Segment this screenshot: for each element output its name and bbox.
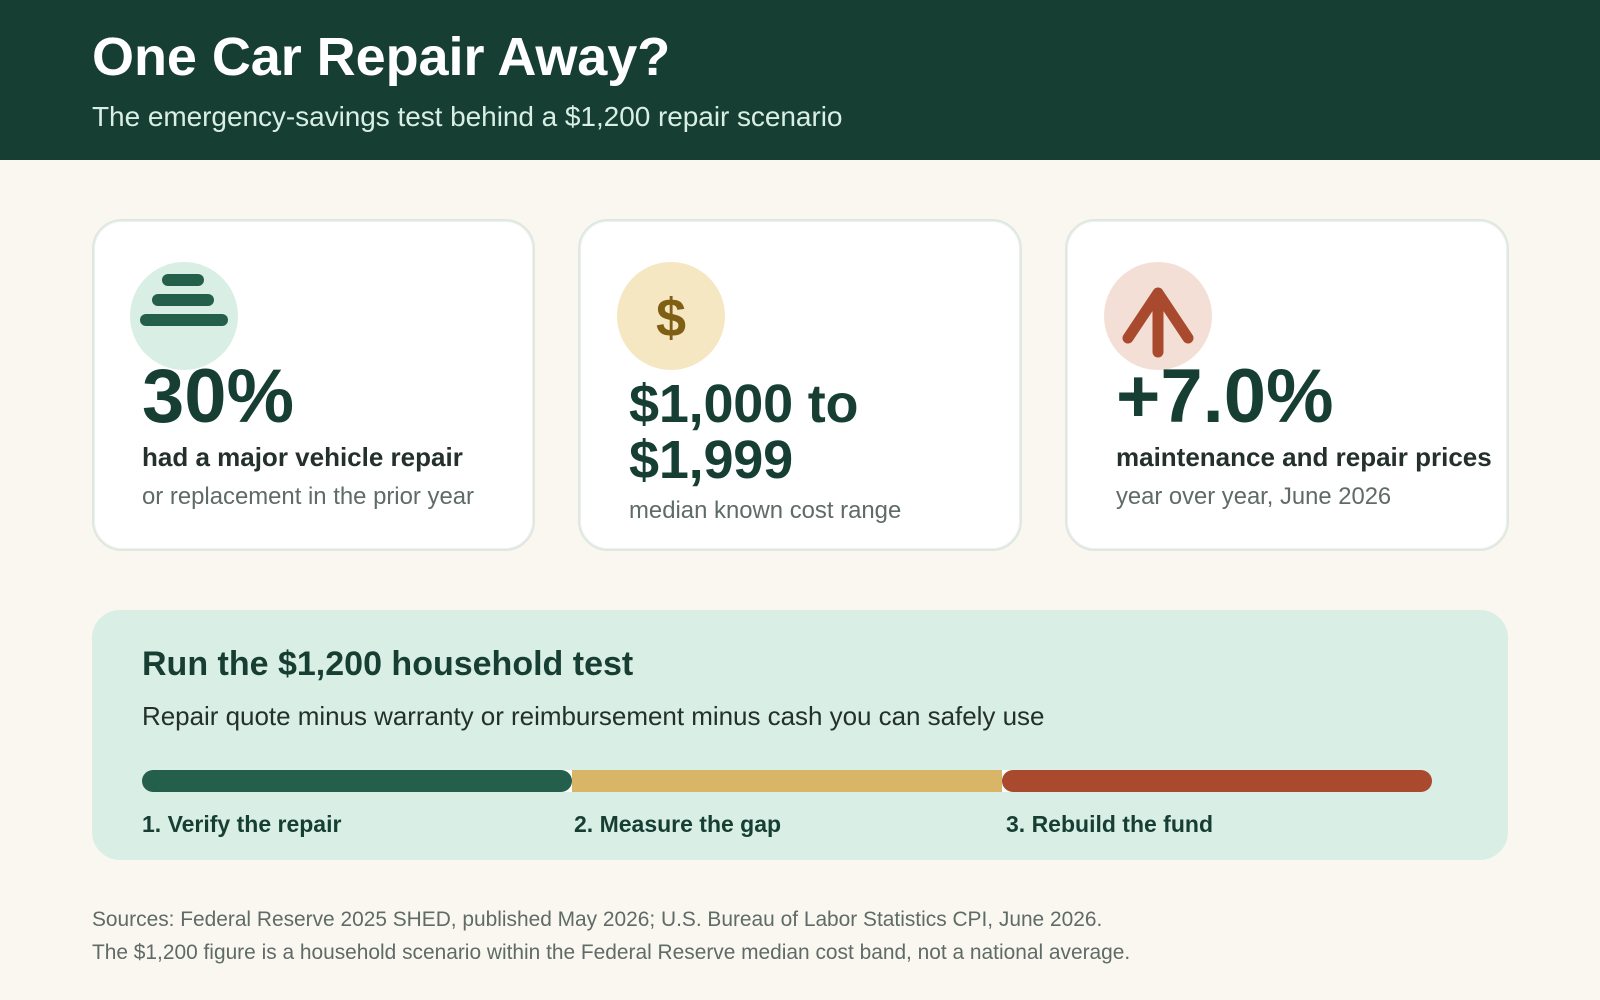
stat value	[629, 374, 858, 490]
panel description: Repair quote minus warranty or reimbursement minus cash you can safely use	[142, 701, 1044, 731]
subtitle: The emergency-savings test behind a $1,200 repair scenario	[92, 101, 842, 132]
stat note: median known cost range	[629, 497, 901, 524]
segment: rebuild	[1002, 770, 1432, 792]
panel: price increase stat card	[1065, 219, 1509, 551]
stat value: $1,000 to	[629, 374, 858, 434]
stat note: or replacement in the prior year	[142, 483, 474, 510]
sources: Sources: Federal Reserve 2025 SHED, published May 2026; U.S. Bureau of Labor Statistics CPI, June 2026.	[92, 908, 1102, 931]
panel heading: Run the $1,200 household test	[142, 645, 633, 683]
icon: dollar sign: $	[656, 288, 686, 348]
title: One Car Repair Away?	[92, 27, 670, 87]
stat value: +7.0%	[1116, 354, 1334, 439]
panel: 30% stat card	[92, 219, 535, 551]
segment: verify	[142, 770, 572, 792]
panel: household test	[92, 610, 1508, 860]
step 2 label: 2. Measure the gap	[574, 811, 781, 837]
step 3 label: 3. Rebuild the fund	[1006, 811, 1213, 837]
stat value: 30%	[142, 354, 294, 439]
stat label: maintenance and repair prices	[1116, 442, 1492, 472]
header band	[0, 0, 1600, 160]
stat label: had a major vehicle repair	[142, 442, 463, 472]
segment: measure	[572, 770, 1002, 792]
panel: cost range stat card	[578, 219, 1022, 551]
icon: dollar sign	[617, 262, 725, 370]
sources: The $1,200 figure is a household scenario within the Federal Reserve median cost band, not a national average.	[92, 941, 1130, 964]
stat value: $1,999	[629, 430, 793, 490]
icon: up arrow	[1104, 262, 1212, 370]
progress bar	[142, 770, 1432, 792]
sources	[92, 908, 1130, 964]
icon: stacked bars	[130, 262, 238, 370]
step 1 label: 1. Verify the repair	[142, 811, 341, 837]
stat note: year over year, June 2026	[1116, 483, 1391, 510]
